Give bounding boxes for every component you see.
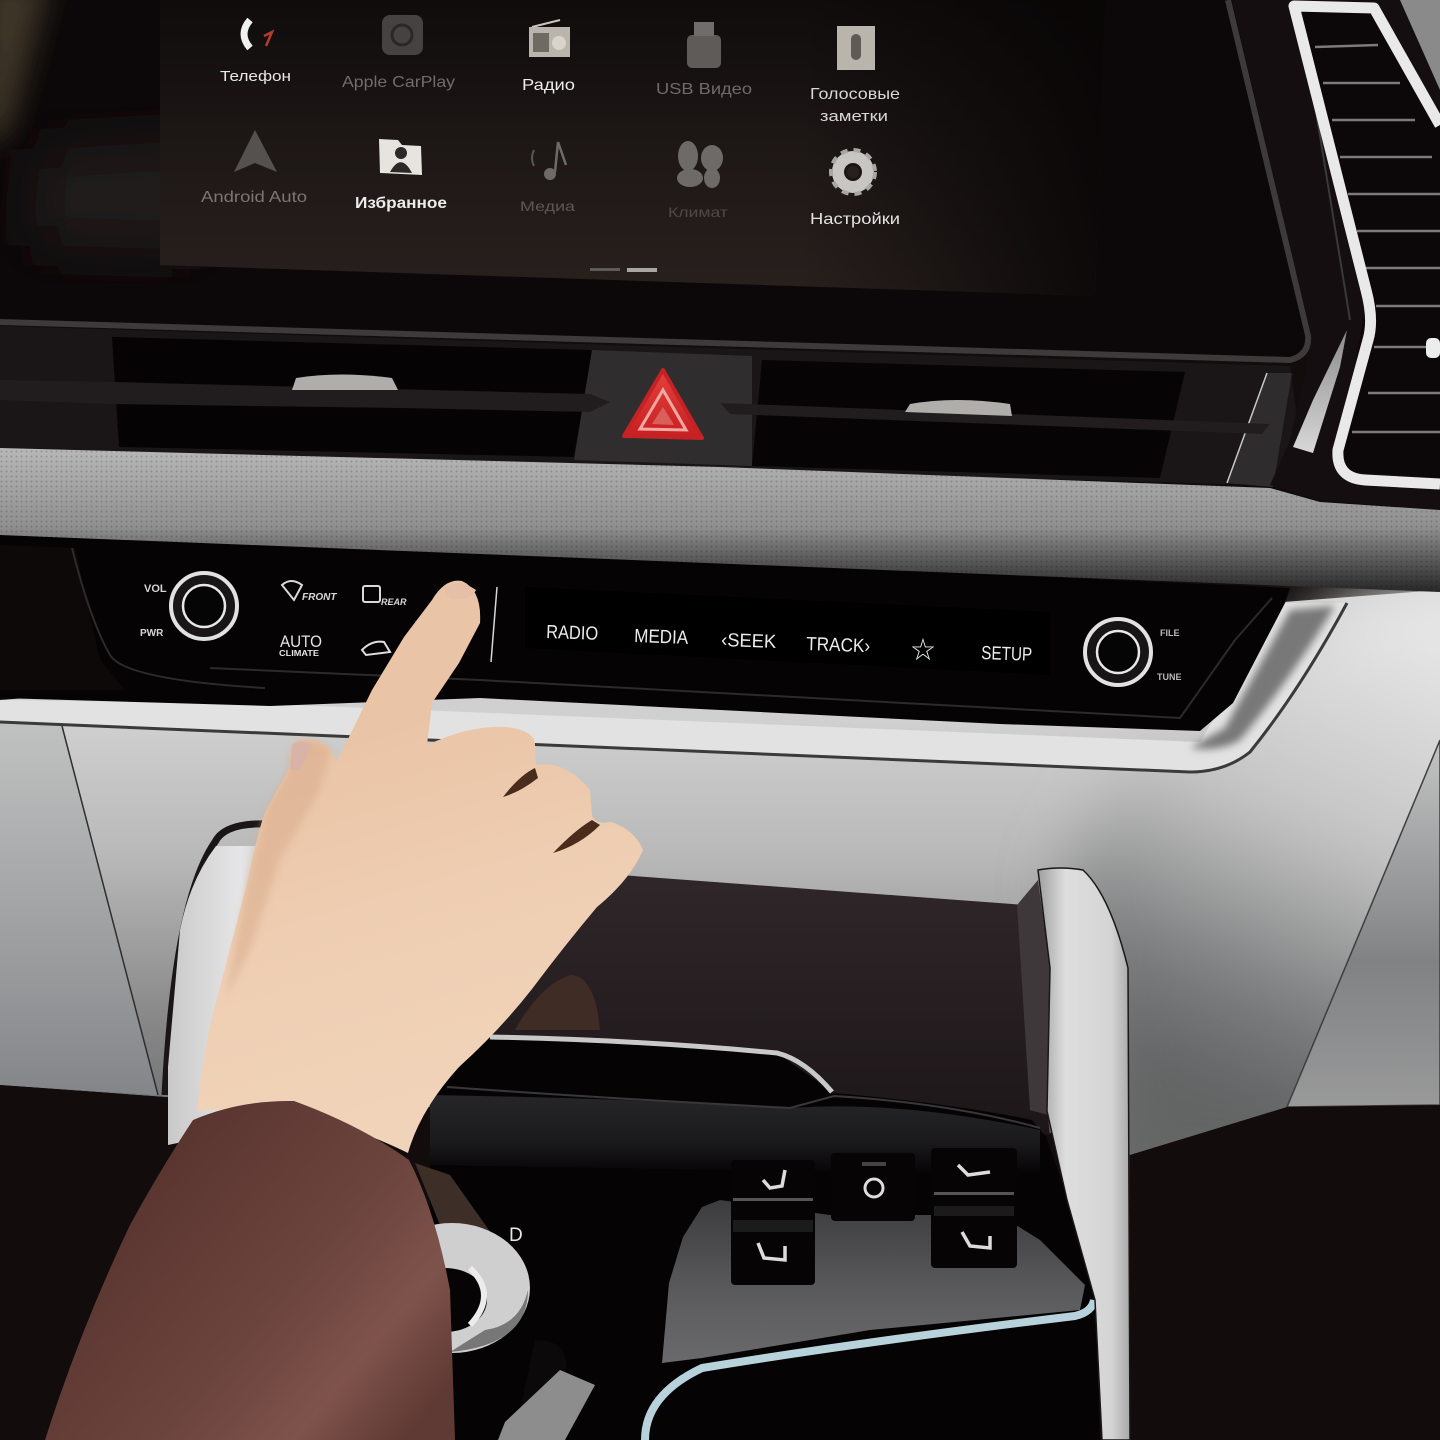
button RADIO: RADIO: [546, 622, 599, 645]
hand: [197, 581, 643, 1153]
label USB video: USB Видео: [656, 81, 752, 98]
icon: voice notes: [810, 26, 900, 103]
corner chrome wedge: [1293, 330, 1347, 453]
button MEDIA: MEDIA: [634, 626, 689, 649]
chrome vent surround: [1294, 6, 1440, 484]
panel: centre console: [374, 1036, 1100, 1440]
favourite star: ☆: [911, 637, 935, 664]
label AUTO climate: [279, 632, 322, 658]
left vent blade: [0, 374, 610, 412]
floor left: [0, 1085, 430, 1440]
vent slats: [1315, 45, 1440, 432]
label AUTO climate: CLIMATE: [279, 648, 319, 658]
console upper band: [430, 1095, 1040, 1175]
label FILE: FILE: [1160, 628, 1180, 638]
little fingernail: [290, 742, 312, 770]
label favourites: Избранное: [355, 195, 447, 212]
label VOL: VOL: [144, 583, 167, 595]
label phone: Телефон: [220, 68, 291, 85]
icon: music note: [520, 142, 575, 214]
front defrost label: [282, 581, 337, 603]
label Android Auto: Android Auto: [201, 189, 307, 206]
label media: Медиа: [520, 198, 575, 214]
icon: phone: [220, 20, 291, 85]
seat button: centre: [831, 1153, 915, 1221]
icon: Apple CarPlay: [342, 15, 455, 91]
icon: Android Auto: [201, 130, 307, 206]
side shading: [225, 740, 331, 1000]
screen frame: [0, 0, 1308, 360]
seat button: left column: [731, 1160, 815, 1285]
volume knob: [171, 573, 237, 639]
panel: chrome strip: [0, 603, 1347, 772]
panel: lower dashboard: [0, 570, 1440, 1170]
label voice notes: Голосовые: [810, 86, 900, 103]
panel: control strip: [0, 530, 1290, 731]
finger gap two: [553, 820, 600, 853]
console light-blue trim: [645, 1300, 1094, 1440]
label settings: Настройки: [810, 211, 900, 228]
recirculation icon: [362, 642, 390, 655]
icon: climate fan: [668, 141, 729, 220]
button TRACK: TRACK›: [806, 634, 871, 657]
icon: hazard triangle: [624, 370, 702, 438]
fingernail: [443, 583, 476, 599]
rear defrost label: REAR: [381, 597, 407, 607]
panel: infotainment screen: [0, 0, 1312, 362]
left silver pillar: [165, 824, 300, 1145]
console top chrome lip: [490, 1037, 832, 1092]
label AUTO climate: AUTO: [280, 632, 322, 651]
left door trim: [0, 722, 158, 1095]
gear selector dial: [374, 1163, 595, 1440]
label PWR: PWR: [140, 628, 164, 639]
left bezel glow: [0, 0, 200, 250]
rear defrost label: [363, 586, 407, 607]
console gloss reflection: [662, 1200, 1085, 1363]
icon: favourites folder: [355, 139, 447, 212]
seat button: right column: [931, 1148, 1017, 1268]
finger gap one: [503, 768, 538, 797]
floor right: [1130, 1105, 1440, 1440]
tune knob: [1085, 619, 1151, 685]
cavity hand reflection: [515, 975, 600, 1030]
outer silver top right: [1400, 0, 1440, 90]
label CarPlay: Apple CarPlay: [342, 74, 455, 91]
label TUNE: TUNE: [1157, 672, 1182, 682]
panel: right bezel and vent: [1232, 0, 1440, 510]
right vent grey wedge: [1227, 373, 1292, 487]
icon: radio: [522, 20, 575, 94]
gear label D: D: [509, 1225, 523, 1246]
label radio: Радио: [522, 77, 575, 94]
hazard panel: [574, 350, 752, 466]
label climate: Климат: [668, 204, 729, 220]
icon: settings gear: [810, 150, 900, 228]
panel: air vent row: [0, 326, 1300, 487]
vent opening: [1296, 10, 1440, 478]
right vent blade: [720, 400, 1270, 434]
page indicator: [590, 268, 657, 272]
label voice notes line 2: заметки: [820, 108, 888, 125]
divider line: [491, 587, 497, 662]
right silver pillar: [1038, 868, 1130, 1440]
sleeve: [45, 1101, 455, 1440]
button SETUP: SETUP: [981, 643, 1033, 666]
button SEEK: ‹SEEK: [721, 630, 777, 653]
icon: USB: [656, 22, 752, 98]
front defrost label: FRONT: [302, 592, 337, 603]
right dashboard facet: [1287, 740, 1440, 1107]
panel: fabric band: [0, 448, 1440, 592]
panel: lower cavity: [450, 868, 1050, 1135]
vent knob: [1426, 338, 1440, 358]
